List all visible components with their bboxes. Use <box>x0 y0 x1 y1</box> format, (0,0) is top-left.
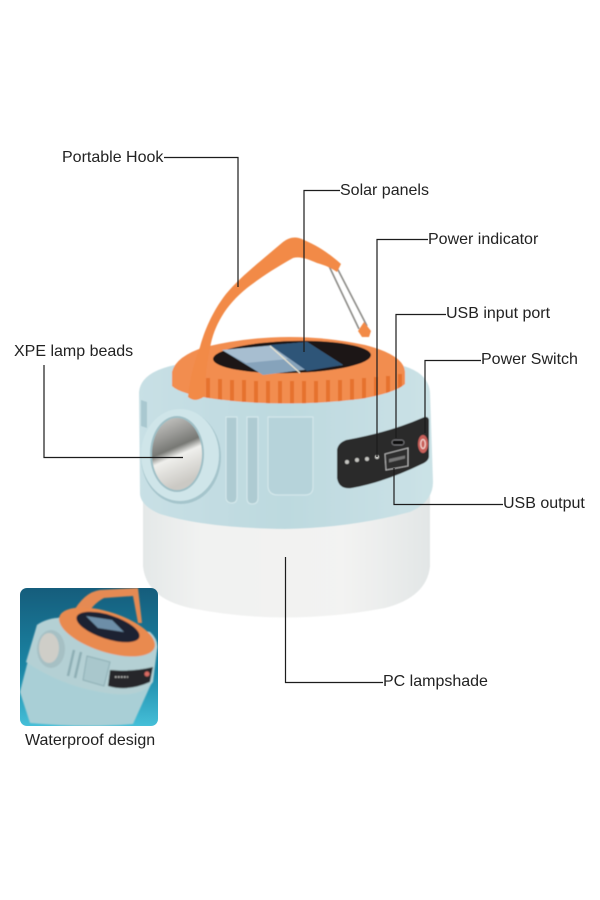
flashlight <box>141 409 221 504</box>
lid ridges <box>196 374 400 406</box>
mini lamp body <box>20 648 158 726</box>
solar well <box>213 339 371 375</box>
callout: Solar panels: Solar panels <box>340 182 429 199</box>
carabiner wire <box>329 264 367 329</box>
waterproof caption: Waterproof design <box>25 732 155 749</box>
carabiner clasp <box>358 322 371 337</box>
control panel <box>337 417 429 488</box>
power button <box>418 435 428 453</box>
callout: PC lampshade: PC lampshade <box>383 673 488 690</box>
mini lamp band <box>26 618 157 694</box>
waterproof photo inset <box>20 588 161 726</box>
handle <box>188 238 341 400</box>
USB-C port <box>392 440 404 445</box>
callout: Power indicator <box>377 231 539 457</box>
callout: Portable Hook <box>62 149 238 287</box>
mini flashlight <box>37 630 65 668</box>
callout: USB input port: USB input port <box>446 305 551 322</box>
mini lid <box>58 607 156 658</box>
mini control panel <box>108 667 153 688</box>
callout: Solar panels <box>304 182 429 352</box>
solar panel <box>222 342 343 375</box>
water background <box>20 588 158 726</box>
callout: PC lampshade <box>286 557 488 690</box>
band grooves <box>226 417 313 504</box>
orange lid <box>172 337 405 404</box>
mini handle <box>72 588 142 623</box>
left side groove <box>141 400 147 428</box>
callout: USB output <box>394 468 585 512</box>
callout: Power indicator: Power indicator <box>428 231 539 248</box>
callout: Portable Hook: Portable Hook <box>62 149 164 166</box>
callout: XPE lamp beads <box>14 343 183 458</box>
indicator dots <box>345 455 379 464</box>
callout: Power Switch: Power Switch <box>481 351 578 368</box>
lampshade <box>143 490 430 618</box>
callout: USB input port <box>396 305 551 438</box>
USB-A port <box>385 448 408 470</box>
callout: USB output: USB output <box>503 495 585 512</box>
lamp product illustration <box>139 238 433 618</box>
callout: XPE lamp beads: XPE lamp beads <box>14 343 133 360</box>
mini grooves <box>68 650 81 678</box>
body band <box>139 365 433 529</box>
callout: Power Switch <box>425 351 578 433</box>
